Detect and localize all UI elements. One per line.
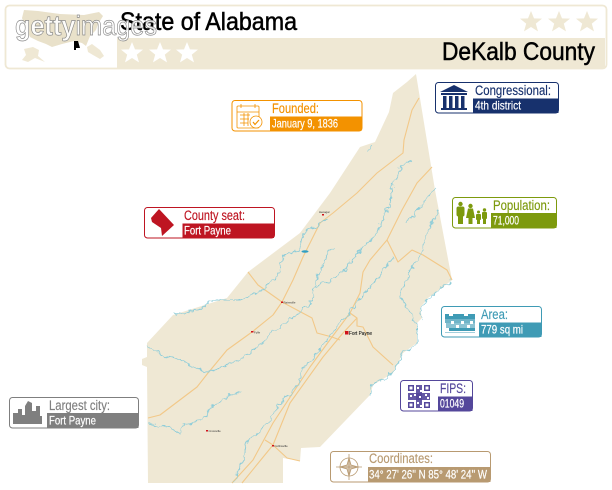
value: 01049 <box>440 396 464 410</box>
icon: government building <box>440 85 468 110</box>
label: Largest city: <box>49 398 110 413</box>
label: Coordinates: <box>369 451 433 466</box>
beige band <box>117 38 605 68</box>
icon: QR code <box>408 385 430 408</box>
Alabama marker <box>74 41 80 50</box>
icon: compass <box>336 454 362 480</box>
small towns <box>206 210 330 448</box>
label: FIPS: <box>440 381 466 396</box>
small towns: Crossville <box>208 429 221 433</box>
icon: pixel area <box>445 313 475 333</box>
lake <box>302 250 308 253</box>
badge: coordinates <box>330 451 490 482</box>
watermark: gettyimages <box>15 10 157 41</box>
value band <box>47 413 138 428</box>
badge: area <box>442 306 542 337</box>
label: Population: <box>493 198 550 213</box>
banner border <box>6 6 606 68</box>
value band <box>473 98 558 113</box>
badge: founded <box>232 100 362 131</box>
label: Founded: <box>272 101 319 116</box>
value band <box>182 224 274 238</box>
value band <box>479 322 542 337</box>
small towns: Rainsville <box>284 300 296 304</box>
small towns: Henagar <box>319 210 330 214</box>
county map <box>142 74 452 483</box>
state title: State of Alabama <box>120 8 297 36</box>
value: 34° 27' 26'' N 85° 48' 24'' W <box>369 468 488 482</box>
beige stars <box>520 11 598 31</box>
badge: congressional <box>436 82 558 113</box>
rivers <box>147 145 452 481</box>
label: County seat: <box>184 208 245 223</box>
value: Fort Payne <box>184 224 231 238</box>
icon: skyline <box>13 401 42 424</box>
roads <box>148 98 452 483</box>
small towns: Fyffe <box>254 330 261 334</box>
value: Fort Payne <box>49 414 96 428</box>
value band <box>438 396 472 411</box>
value band <box>491 213 556 228</box>
county title: DeKalb County <box>442 38 595 66</box>
icon: calendar <box>237 104 262 128</box>
icon: family <box>456 202 487 224</box>
icon: seat district <box>151 209 174 236</box>
badge: largest city <box>10 398 138 428</box>
US locator map <box>22 10 104 62</box>
badge: county seat <box>144 208 274 238</box>
value: 4th district <box>475 98 522 112</box>
small towns: Collinsville <box>274 444 288 448</box>
value: 71,000 <box>493 214 519 228</box>
header banner <box>6 6 606 68</box>
label: Area: <box>481 307 508 322</box>
value band <box>270 116 362 131</box>
white stars <box>121 42 198 62</box>
value: January 9, 1836 <box>272 116 338 130</box>
badge: FIPS <box>400 380 472 411</box>
value band <box>368 467 490 482</box>
county shape <box>142 74 452 483</box>
label: Congressional: <box>475 83 551 98</box>
value: 779 sq mi <box>481 322 523 336</box>
town: Fort Payne: Fort Payne <box>349 331 372 337</box>
badge: population <box>452 198 556 228</box>
